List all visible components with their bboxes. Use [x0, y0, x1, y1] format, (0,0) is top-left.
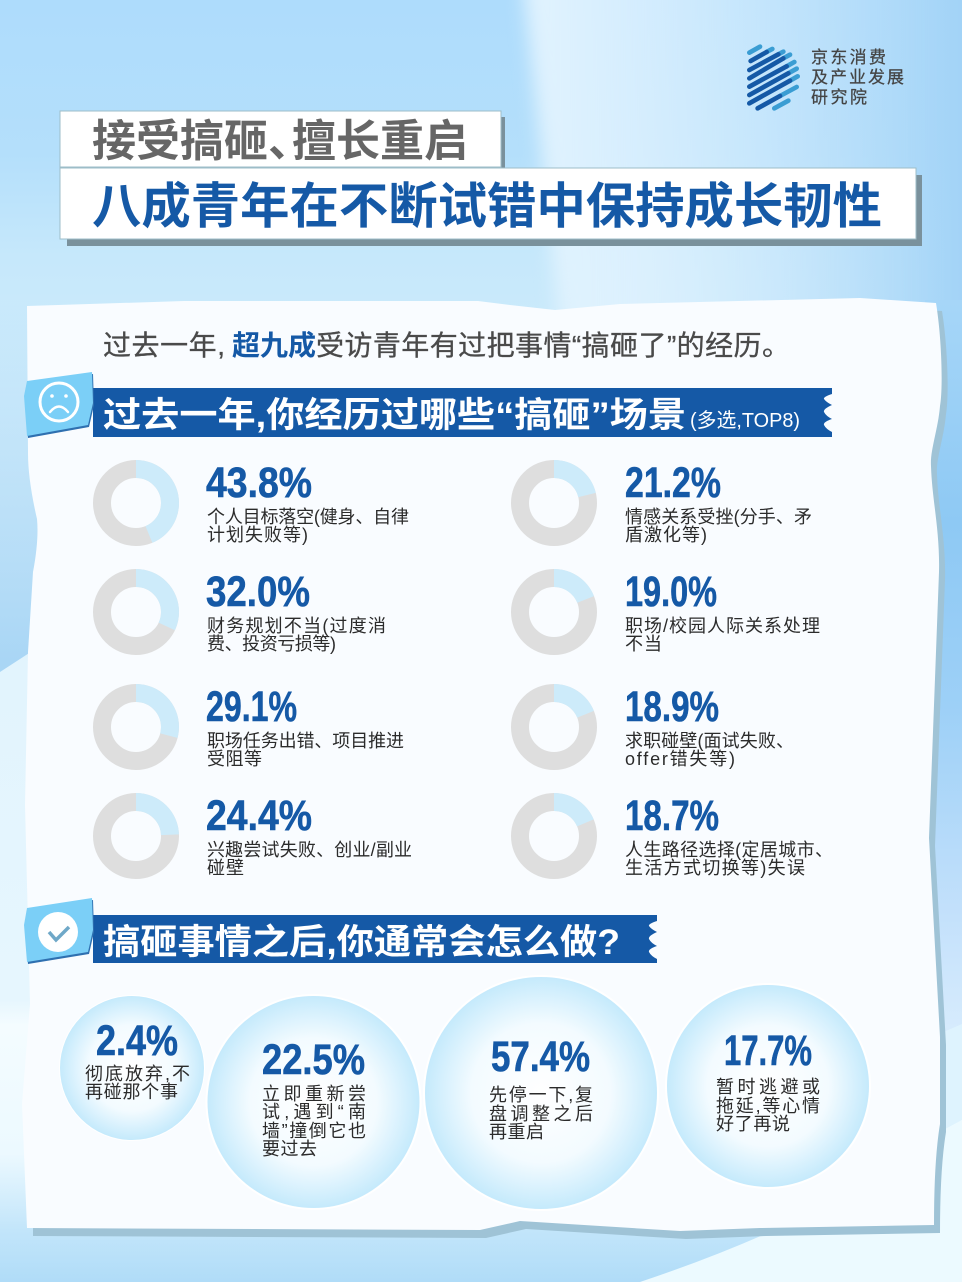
item 18.7%: 生活方式切换等)失误 — [625, 858, 805, 878]
heading: 过去一年,你经历过哪些“搞砸”场景 — [103, 396, 686, 435]
item 43.8%: 个人目标落空(健身、自律 — [207, 507, 409, 527]
bubble 57.4%: 57.4% — [491, 1033, 590, 1081]
logo — [749, 47, 904, 108]
donut grid — [102, 459, 833, 878]
icon: check mark — [24, 898, 94, 964]
logo mark — [749, 47, 798, 108]
ribbon — [93, 915, 657, 963]
logo text: 研究院 — [811, 88, 867, 107]
heading: 搞砸事情之后,你通常会怎么做? — [103, 923, 620, 962]
item 21.2%: 情感关系受挫(分手、矛 — [625, 507, 812, 527]
intro sentence — [103, 330, 790, 361]
bubble 57.4%: 盘调整之后 — [489, 1104, 593, 1124]
item 24.4%: 24.4% — [206, 792, 312, 840]
bubble 22.5%: 22.5% — [262, 1036, 365, 1084]
item 29.1%: 职场任务出错、项目推进 — [207, 731, 404, 751]
icon: sad face — [24, 372, 94, 438]
item 18.9%: 18.9% — [625, 683, 719, 731]
bubble 17.7%: 暂时逃避或 — [716, 1077, 820, 1097]
panel sheet — [22, 298, 942, 1231]
subtitle box — [60, 111, 505, 173]
paper panel — [22, 298, 948, 1239]
bubble 2.4%: 彻底放弃,不 — [85, 1064, 190, 1084]
bubble 22.5%: 立即重新尝 — [262, 1084, 366, 1104]
main title box: 八成青年在不断试错中保持成长韧性 — [92, 180, 882, 234]
item 18.9% — [520, 683, 794, 769]
bubble 2.4%: 2.4% — [96, 1017, 178, 1065]
bubble 22.5%: 墙”撞倒它也 — [262, 1121, 366, 1141]
item 21.2%: 盾激化等) — [625, 525, 707, 545]
bubble 22.5%: 试,遇到“南 — [262, 1102, 366, 1122]
bubble 17.7%: 好了再说 — [716, 1114, 790, 1134]
section header: scenes — [24, 372, 832, 438]
bubble 57.4%: 再重启 — [489, 1122, 544, 1142]
bubble 57.4%: 先停一下,复 — [489, 1085, 593, 1105]
item 18.9%: 求职碰壁(面试失败、 — [625, 731, 794, 751]
item 19.0%: 19.0% — [625, 568, 717, 616]
bubble 17.7% — [665, 983, 871, 1189]
item 32.0%: 财务规划不当(过度消 — [207, 616, 386, 636]
panel shadow — [33, 306, 948, 1239]
item 24.4%: 碰壁 — [207, 858, 244, 878]
item 32.0%: 32.0% — [206, 568, 310, 616]
item 18.9%: offer错失等) — [625, 749, 735, 769]
item 19.0%: 职场/校园人际关系处理 — [625, 616, 820, 636]
item 21.2% — [520, 459, 812, 545]
item 24.4%: 兴趣尝试失败、创业/副业 — [207, 840, 412, 860]
item 21.2%: 21.2% — [625, 459, 721, 507]
logo text: 及产业发展 — [811, 68, 904, 87]
bubble 57.4% — [423, 975, 659, 1211]
main title box — [60, 168, 922, 246]
item 43.8%: 43.8% — [206, 459, 312, 507]
item 18.7%: 人生路径选择(定居城市、 — [625, 840, 833, 860]
item 29.1%: 29.1% — [206, 683, 297, 731]
item 24.4% — [102, 792, 412, 878]
item 19.0%: 不当 — [625, 634, 662, 654]
bubble 17.7%: 拖延,等心情 — [716, 1096, 820, 1116]
intro sentence: 受访青年有过把事情“搞砸了”的经历。 — [316, 330, 790, 361]
bubble 17.7%: 17.7% — [724, 1027, 812, 1075]
bubble 22.5% — [206, 994, 422, 1210]
item 19.0% — [520, 568, 820, 654]
intro sentence: 超九成 — [232, 330, 316, 361]
ribbon — [93, 388, 832, 437]
item 18.7%: 18.7% — [625, 792, 719, 840]
title block — [60, 111, 922, 246]
heading note: (多选,TOP8) — [690, 409, 800, 432]
section header: reactions — [24, 898, 657, 964]
bubble 22.5%: 要过去 — [262, 1139, 317, 1159]
logo text: 京东消费 — [811, 48, 886, 67]
item 43.8% — [102, 459, 409, 545]
item 32.0%: 费、投资亏损等) — [207, 634, 336, 654]
item 29.1% — [102, 683, 404, 769]
logo text — [811, 48, 904, 107]
intro sentence: 过去一年, — [103, 330, 225, 361]
bubble 2.4%: 再碰那个事 — [85, 1082, 178, 1102]
item 29.1%: 受阻等 — [207, 749, 262, 769]
item 32.0% — [102, 568, 386, 654]
item 43.8%: 计划失败等) — [207, 525, 308, 545]
subtitle box: 接受搞砸、擅长重启 — [92, 117, 468, 166]
bubble 2.4% — [59, 995, 205, 1141]
item 18.7% — [520, 792, 833, 878]
